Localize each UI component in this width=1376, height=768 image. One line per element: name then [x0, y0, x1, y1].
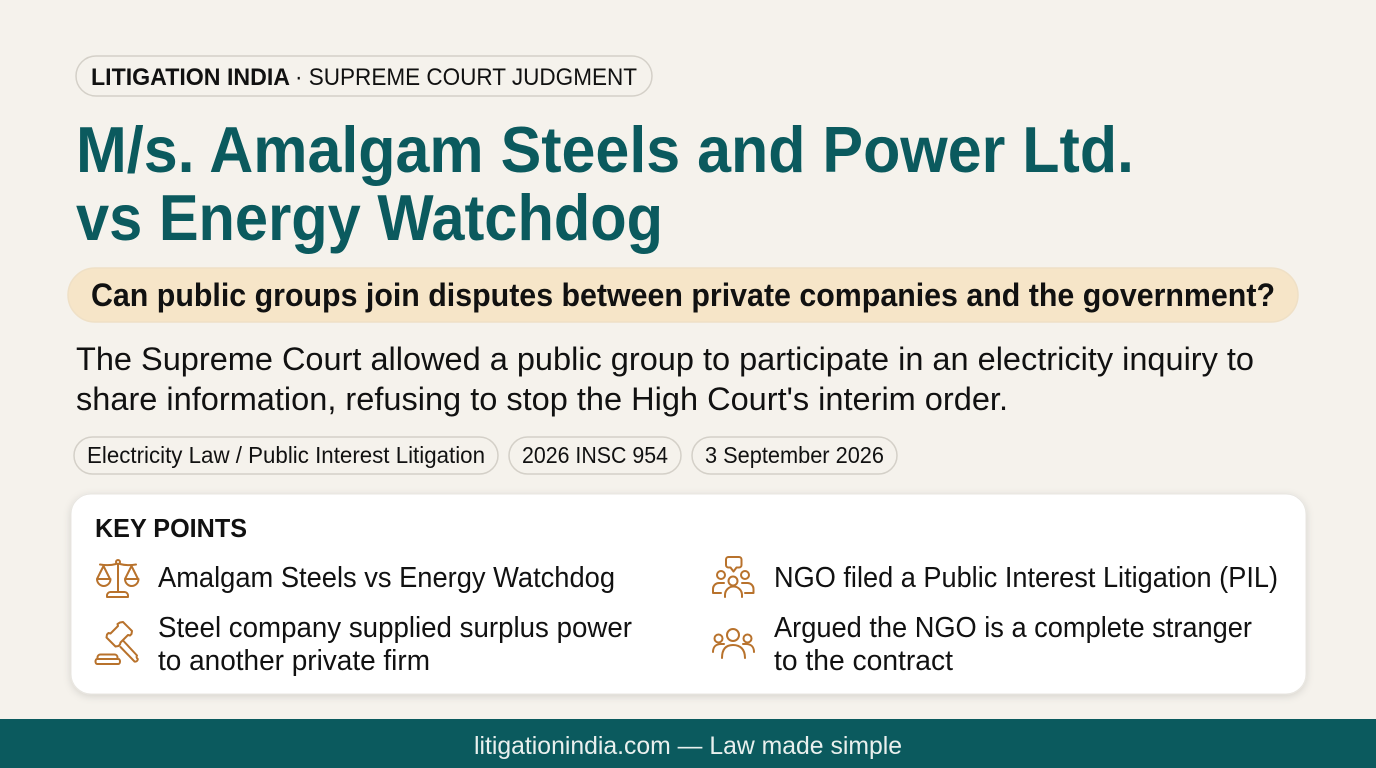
meta chips [74, 437, 897, 474]
footer bar: litigationindia.com — Law made simple [474, 732, 902, 760]
key point text: stranger: Argued the NGO is a complete stranger [774, 612, 1252, 644]
key point text: surplus power: Steel company supplied surplus power [158, 612, 632, 644]
header tag pill: · SUPREME COURT JUDGMENT [295, 64, 637, 91]
chip: citation [509, 437, 681, 474]
title: M/s. Amalgam Steels and Power Ltd. [76, 113, 1134, 186]
icon: gavel [96, 622, 138, 664]
chip: subject: Electricity Law / Public Interest Litigation [87, 442, 485, 468]
header tag pill [76, 56, 652, 96]
icon: group with speech bubble [713, 557, 754, 597]
chip: date: 3 September 2026 [705, 442, 884, 468]
icon: group of people [713, 629, 754, 658]
key point text: stranger [774, 612, 1252, 677]
question banner [68, 268, 1298, 322]
title: vs Energy Watchdog [76, 181, 663, 254]
header tag pill: LITIGATION INDIA [91, 64, 290, 91]
chip: date [692, 437, 897, 474]
panel: key points [71, 494, 1306, 694]
key point text: parties: Amalgam Steels vs Energy Watchdog [158, 562, 615, 594]
summary text: The Supreme Court allowed a public group to participate in an electricity inquiry to [76, 341, 1254, 377]
key point text: surplus power: to another private firm [158, 645, 430, 677]
key point text: stranger: to the contract [774, 645, 953, 677]
summary text [76, 341, 1254, 417]
key point text: surplus power [158, 612, 632, 677]
chip: citation: 2026 INSC 954 [522, 442, 668, 468]
title [76, 113, 1134, 254]
icon: scales [97, 560, 138, 597]
key point text: PIL: NGO filed a Public Interest Litigation (PIL) [774, 562, 1278, 594]
question banner: Can public groups join disputes between private companies and the government? [91, 277, 1275, 313]
key points heading: KEY POINTS [95, 513, 247, 543]
footer bar [0, 719, 1376, 768]
summary text: share information, refusing to stop the High Court's interim order. [76, 381, 1008, 417]
chip: subject [74, 437, 498, 474]
